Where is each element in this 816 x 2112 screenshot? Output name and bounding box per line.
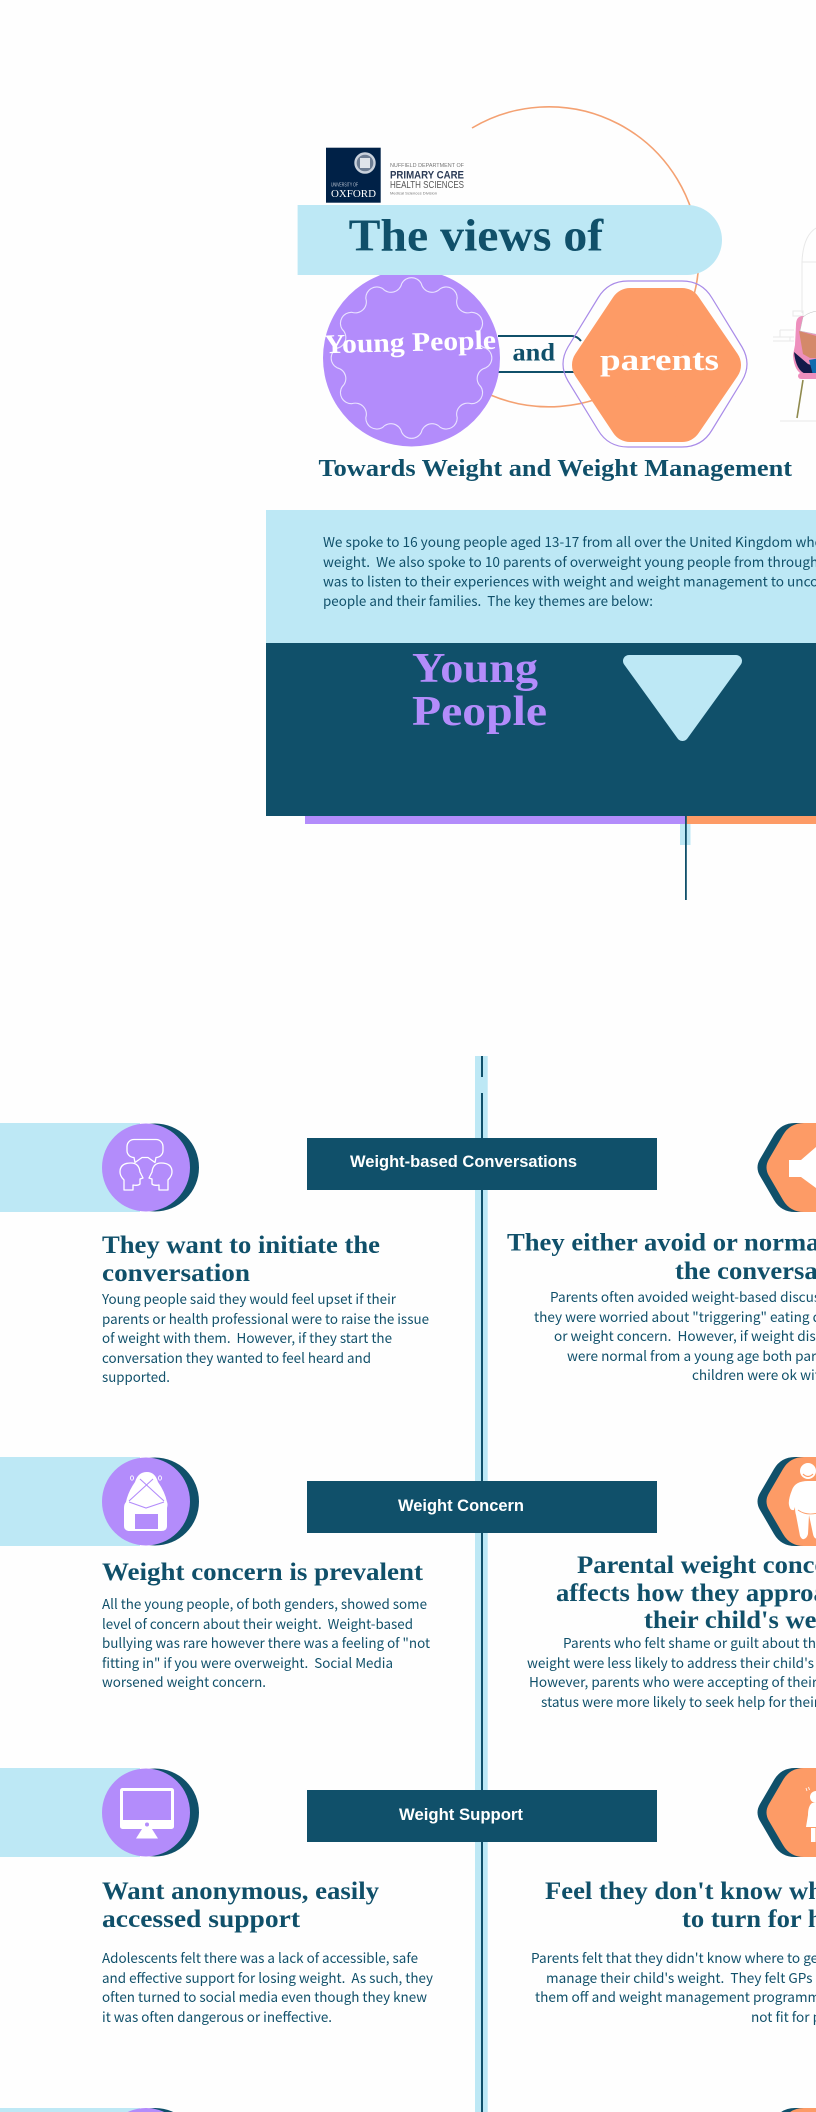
- panel: young people header: [266, 643, 816, 816]
- panel: young people header: Young: [412, 646, 538, 692]
- young people text: Want anonymous, easily: [102, 1878, 380, 1905]
- logo: University of Oxford, Nuffield Department of Primary Care Health Sciences: [326, 148, 464, 203]
- young people text: it was often dangerous or ineffective.: [102, 2006, 332, 2026]
- young people text: level of concern about their weight. Weight-based: [102, 1613, 413, 1633]
- left icon: two heads talking: [0, 1123, 199, 1212]
- left icon: computer monitor: [0, 1768, 199, 1857]
- young people circle: Young People: [324, 325, 496, 359]
- young people text: [102, 1878, 433, 2026]
- young people text: Weight concern is prevalent: [102, 1559, 424, 1586]
- young people text: worsened weight concern.: [102, 1671, 266, 1691]
- young people text: of weight with them. However, if they start the: [102, 1327, 392, 1347]
- heading bar: [307, 1790, 657, 1842]
- right icon: worried girl: [758, 1768, 816, 1857]
- young people text: bullying was rare however there was a feeling of "not: [102, 1632, 430, 1652]
- young people text: Young people said they would feel upset if their: [101, 1288, 397, 1308]
- timeline stub: [680, 816, 690, 900]
- heading bar: Weight-based Conversations: [350, 1153, 577, 1171]
- decorative orange arc: [472, 107, 699, 407]
- young people text: Adolescents felt there was a lack of accessible, safe: [102, 1947, 418, 1967]
- young people text: All the young people, of both genders, showed some: [102, 1593, 427, 1613]
- parents text: [531, 1877, 816, 2026]
- young people text: and effective support for losing weight. As such, they: [102, 1967, 433, 1987]
- panel: young people header: People: [412, 689, 547, 735]
- logo: University of Oxford, Nuffield Department of Primary Care Health Sciences: OXFORD: [331, 188, 376, 200]
- young people text: supported.: [102, 1366, 170, 1386]
- logo: University of Oxford, Nuffield Department of Primary Care Health Sciences: Medical Sciences Division: [390, 190, 437, 196]
- word: and: and: [512, 340, 555, 367]
- title banner: [298, 205, 722, 275]
- right icon: speaker: [758, 1123, 816, 1212]
- young people text: [101, 1232, 429, 1386]
- section: weight-based conversations: [0, 1123, 816, 1386]
- parents hexagon: parents: [600, 342, 719, 377]
- logo: University of Oxford, Nuffield Department of Primary Care Health Sciences: NUFFIELD DEPARTMENT OF: [390, 163, 464, 169]
- young people text: accessed support: [102, 1906, 301, 1933]
- colour bars under header: [305, 816, 816, 824]
- young people text: conversation they wanted to feel heard and: [102, 1347, 371, 1367]
- parents hexagon: [563, 281, 747, 447]
- section: weight concern: [0, 1457, 816, 1711]
- panel: introduction: people and their families. The key themes are below:: [323, 590, 653, 610]
- logo: University of Oxford, Nuffield Department of Primary Care Health Sciences: UNIVERSITY OF: [331, 183, 358, 189]
- parents text: [507, 1228, 816, 1384]
- parents text: [527, 1551, 816, 1711]
- section: next row, cut off at page bottom: [0, 2108, 816, 2112]
- young people text: fitting in" if you were overweight. Social Media: [102, 1652, 393, 1672]
- connector lines between circle and hexagon: [498, 336, 581, 372]
- left icon: worried person: [0, 1457, 199, 1546]
- young people text: They want to initiate the: [102, 1232, 380, 1259]
- subtitle: Towards Weight and Weight Management: [318, 456, 792, 482]
- title banner: The views of: [349, 211, 604, 261]
- illustration: person in chair: [773, 228, 816, 421]
- panel: introduction: [266, 510, 816, 643]
- section: weight support: [0, 1768, 816, 2026]
- logo: University of Oxford, Nuffield Department of Primary Care Health Sciences: HEALTH SCIENCES: [390, 180, 464, 191]
- central timeline: [475, 1056, 488, 2112]
- logo: University of Oxford, Nuffield Department of Primary Care Health Sciences: PRIMARY CARE: [390, 170, 464, 182]
- heading bar: Weight Concern: [398, 1497, 524, 1515]
- young people text: [102, 1559, 430, 1691]
- young people text: often turned to social media even though they knew: [102, 1986, 427, 2006]
- heading bar: [307, 1481, 657, 1533]
- young people text: parents or health professional were to raise the issue: [102, 1308, 429, 1328]
- young people circle: [323, 270, 500, 446]
- heading bar: [307, 1138, 657, 1190]
- right icon: overweight person: [758, 1457, 816, 1546]
- heading bar: Weight Support: [399, 1806, 524, 1824]
- young people text: conversation: [102, 1260, 250, 1287]
